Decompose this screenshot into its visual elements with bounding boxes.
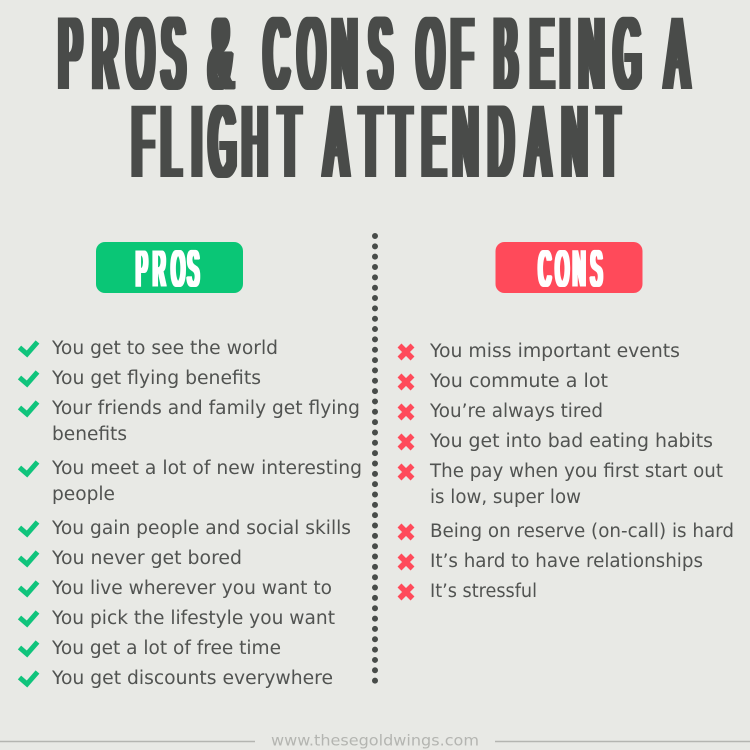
pro item: friends and family: benefits: [52, 424, 127, 445]
con item: reserve: Being on reserve (on-call) is hard: [430, 521, 734, 542]
pro item: new people: You meet a lot of new interesting: [51, 458, 362, 479]
con item: tired: You’re always tired: [429, 401, 603, 422]
con item: miss events: You miss important events: [429, 341, 680, 362]
dotted divider: [372, 236, 378, 681]
title: FLIGHT ATTENDANT: [133, 85, 619, 199]
title: [59, 0, 689, 199]
panel: cons list: [400, 341, 734, 602]
pro item: see the world: You get to see the world: [51, 338, 278, 359]
panel: pros heading: PROS: [136, 242, 199, 298]
footer: www.thesegoldwings.com: [271, 732, 479, 750]
pro item: friends and family: [20, 398, 360, 445]
title: PROS & CONS OF BEING A: [59, 0, 689, 111]
pro item: lifestyle: You pick the lifestyle you want: [51, 608, 335, 629]
pro item: live anywhere: You live wherever you want to: [51, 578, 332, 599]
pro item: free time: You get a lot of free time: [51, 638, 281, 659]
panel: pros heading: [96, 242, 243, 298]
pro item: social skills: You gain people and social skills: [51, 518, 351, 539]
con item: low pay: is low, super low: [430, 487, 581, 508]
con item: stressful: It’s stressful: [430, 581, 537, 602]
con item: commute: You commute a lot: [429, 371, 608, 392]
pro item: new people: people: [52, 484, 115, 505]
panel: cons heading: CONS: [539, 242, 602, 298]
con item: relationships: It’s hard to have relationships: [430, 551, 703, 572]
pro item: flying benefits: You get flying benefits: [51, 368, 261, 389]
panel: pros list: [20, 338, 362, 689]
pro item: discounts: You get discounts everywhere: [51, 668, 333, 689]
pro item: new people: [20, 458, 362, 505]
pro item: friends and family: Your friends and family get flying: [51, 398, 360, 419]
con item: eating habits: You get into bad eating habits: [429, 431, 713, 452]
con item: low pay: The pay when you first start out: [429, 461, 723, 482]
con item: low pay: [400, 461, 723, 508]
panel: cons heading: [496, 242, 642, 298]
pro item: never bored: You never get bored: [51, 548, 242, 569]
